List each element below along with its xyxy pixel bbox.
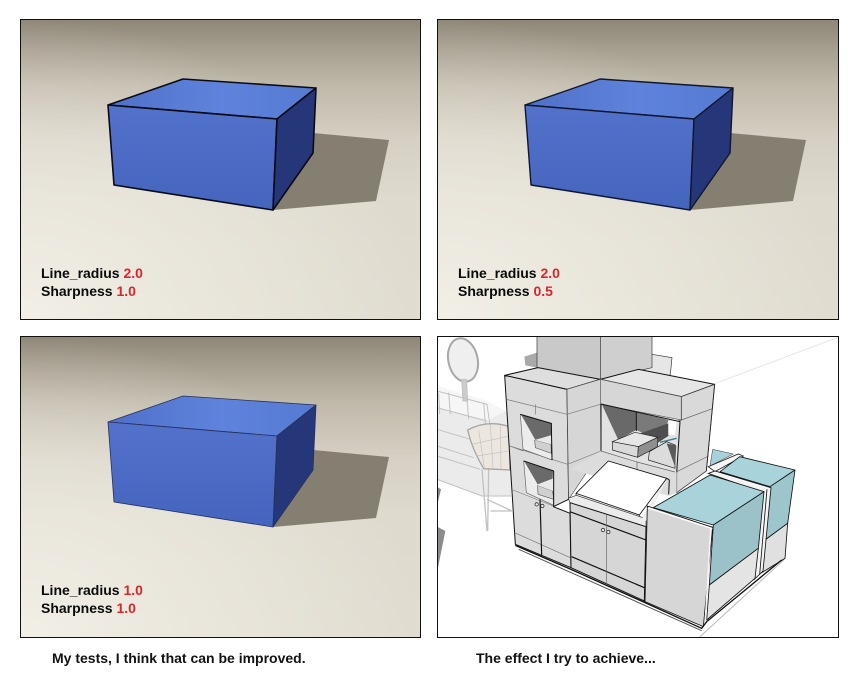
panel: test line radius 2.0 sharpness 1.0: [20, 20, 420, 320]
shadow: [690, 133, 806, 210]
panel: test line radius 2.0 sharpness 0.5: [438, 20, 838, 320]
ground line: [700, 560, 784, 637]
teal bar in opening: [660, 438, 677, 442]
chimney: [537, 336, 652, 379]
left cabinet door line: [540, 499, 542, 555]
caption: my tests: My tests, I think that can be improved.: [52, 650, 306, 666]
dark background wedges: [437, 487, 441, 506]
shelf boxes: [612, 432, 675, 468]
base shadow strip: [515, 545, 782, 628]
lower cabinet handles: [601, 528, 610, 534]
label: Sharpness 0.5: [458, 283, 553, 299]
far teal top: [710, 449, 733, 466]
divider strips: [708, 471, 771, 579]
label: Sharpness 1.0: [41, 283, 136, 299]
label: Line_radius 2.0: [458, 265, 560, 281]
left cabinet handles: [535, 503, 544, 508]
faded furniture in background: [437, 335, 512, 531]
label: Sharpness 1.0: [41, 600, 136, 616]
blue box: [525, 79, 733, 210]
blue box: [108, 79, 316, 210]
grill hood: [576, 461, 667, 520]
white strip between units: [708, 454, 743, 472]
shadow: [273, 450, 389, 527]
left tower: [505, 368, 600, 389]
rear teal unit: [720, 457, 795, 573]
rear ledge: [637, 354, 672, 378]
front teal unit: [653, 475, 764, 620]
label: Line_radius 2.0: [41, 265, 143, 281]
panel: test line radius 1.0 sharpness 1.0: [20, 336, 420, 638]
shadow: [273, 133, 389, 210]
panel: target effect sketch of outdoor kitchen: [437, 335, 838, 638]
perspective guide line: [715, 338, 837, 384]
lower cabinet: [570, 503, 646, 601]
front gray panel: [645, 506, 713, 627]
right tower opening contents: [602, 404, 636, 440]
right tower: [600, 369, 715, 397]
left tower openings: [520, 414, 554, 506]
blue box: [108, 396, 316, 527]
caption: target effect: The effect I try to achieve...: [476, 650, 656, 666]
label: Line_radius 1.0: [41, 582, 143, 598]
